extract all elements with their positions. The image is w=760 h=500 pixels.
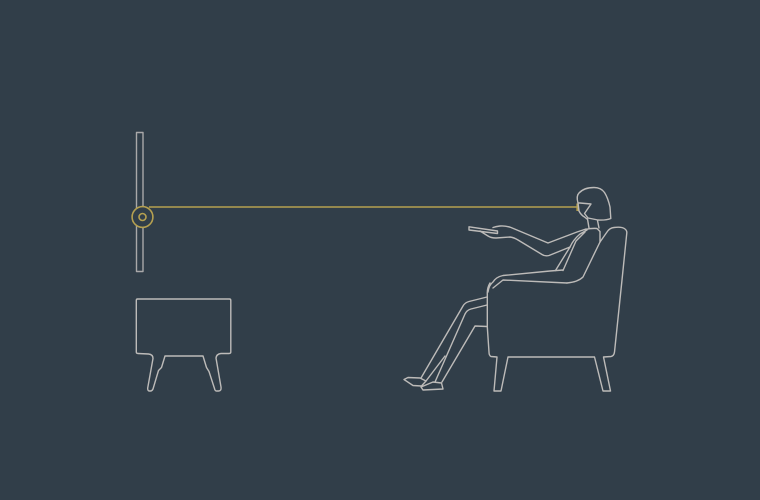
shoes: [404, 378, 443, 390]
head and hair: [577, 188, 611, 220]
resting arm: [488, 270, 567, 292]
neck: [588, 219, 599, 228]
icon: wall-mounted TV seen from the side: [136, 132, 143, 272]
icon: armchair: [487, 227, 627, 391]
icon: TV stand: [136, 299, 231, 391]
icon: TV centre target: [132, 207, 153, 227]
upper leg: [421, 297, 487, 382]
torso: [556, 228, 600, 283]
arm reaching forward: [480, 226, 586, 256]
figure: seated viewer: [404, 188, 611, 390]
icon: eye marker: [576, 204, 579, 211]
lower leg: [426, 326, 487, 382]
remote control: [469, 227, 498, 234]
arrow: eye line from viewer to TV: [149, 206, 578, 208]
